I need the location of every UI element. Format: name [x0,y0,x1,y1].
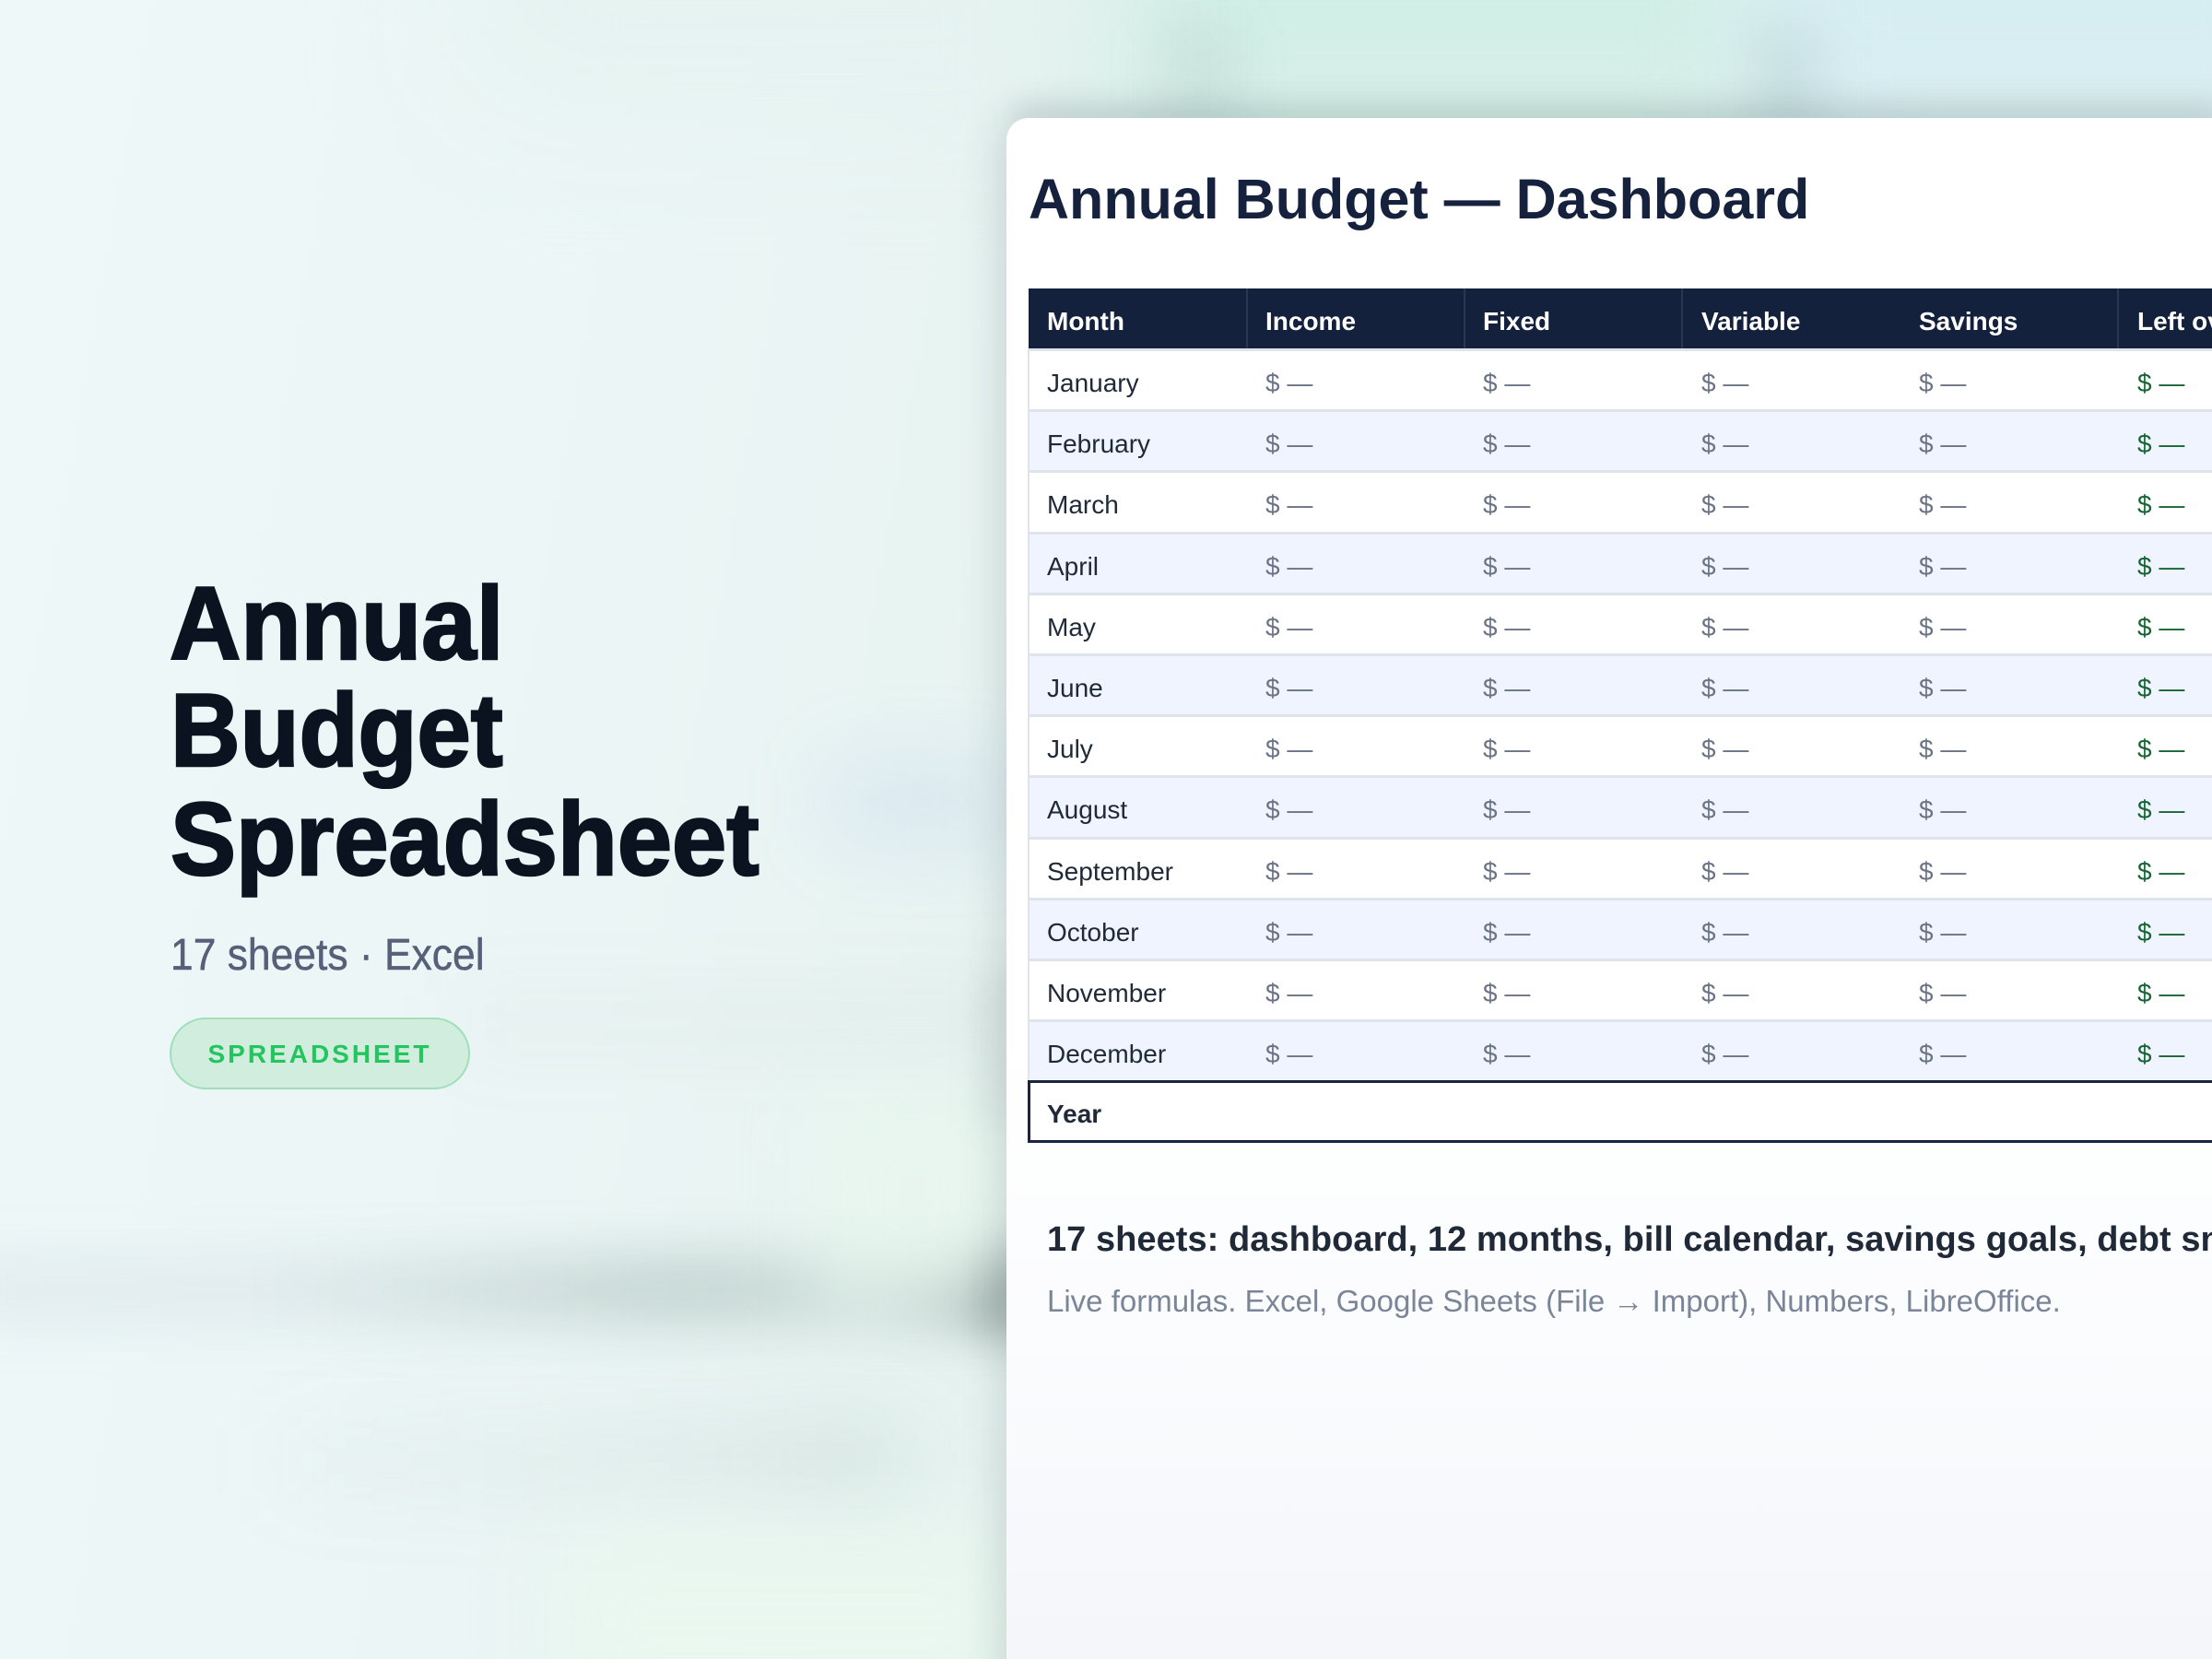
table row: May: $ — [1701,613,1748,641]
table row: August: $ — [1701,795,1748,824]
table row: March: March [1047,490,1119,519]
table row: August [1028,778,2212,840]
table row: April: $ — [2137,552,2184,581]
table row: January [1028,351,2212,412]
badge: spreadsheet [170,1018,470,1089]
table row: July: $ — [2137,735,2184,763]
table header row: Month [1047,307,1124,335]
table row: May [1028,595,2212,656]
table row: November: $ — [1919,979,1966,1007]
table row: January: $ — [1919,369,1966,397]
table row: December: $ — [2137,1040,2184,1068]
table row: July: $ — [1919,735,1966,763]
table row: January: $ — [1265,369,1312,397]
table row: February [1028,412,2212,473]
table row: September: $ — [1701,857,1748,886]
title: Annual Budget Spreadsheet [170,566,759,898]
table row: February: $ — [2137,429,2184,458]
table row: June: $ — [2137,674,2184,702]
table row: November: $ — [1701,979,1748,1007]
subtitle: 17 sheets · Excel [171,931,485,980]
table row: May: $ — [2137,613,2184,641]
table row: September: $ — [1483,857,1530,886]
table row: April: April [1047,552,1099,581]
table row: March: $ — [1265,490,1312,519]
text: compatibility note: Live formulas. Excel, Google Sheets (File → Import), Numbers, LibreOffice. [1047,1284,2061,1318]
table row: June: $ — [1265,674,1312,702]
table row: August: $ — [2137,795,2184,824]
table row: December [1028,1022,2212,1081]
table row: September: September [1047,857,1173,886]
table row: February: $ — [1701,429,1748,458]
table row: October: $ — [1919,918,1966,947]
table row: August: $ — [1265,795,1312,824]
title: Annual Budget Spreadsheet: Spreadsheet [171,782,759,897]
table row: April: $ — [1701,552,1748,581]
table row: August: $ — [1919,795,1966,824]
table row: January: $ — [1701,369,1748,397]
table row: October [1028,900,2212,961]
table row: March: $ — [1701,490,1748,519]
table row: June: $ — [1701,674,1748,702]
table row: April: $ — [1483,552,1530,581]
table row: December: December [1047,1040,1166,1068]
table row: February: $ — [1265,429,1312,458]
table row: September: $ — [1919,857,1966,886]
table row: September [1028,840,2212,900]
table row: June: June [1047,674,1103,702]
heading: dashboard title: Annual Budget — Dashboard [1029,168,1809,230]
table row: January: $ — [2137,369,2184,397]
table row: July [1028,717,2212,778]
table row: October: October [1047,918,1139,947]
table row: February: $ — [1483,429,1530,458]
table row: May: $ — [1483,613,1530,641]
table row: April: $ — [1265,552,1312,581]
title: Annual Budget Spreadsheet: Annual [170,566,503,681]
table row: October: $ — [1701,918,1748,947]
table row: December: $ — [1483,1040,1530,1068]
table row: January: January [1047,369,1139,397]
table row: December: $ — [1265,1040,1312,1068]
table row: July: $ — [1701,735,1748,763]
table row: Year total: Year [1047,1100,1101,1128]
badge: spreadsheet: SPREADSHEET [207,1040,432,1068]
table row: August: $ — [1483,795,1530,824]
table row: May: May [1047,613,1096,641]
table row: November: $ — [2137,979,2184,1007]
table row: November: $ — [1265,979,1312,1007]
table row: March: $ — [2137,490,2184,519]
table row: July: $ — [1483,735,1530,763]
table row: March: $ — [1919,490,1966,519]
table row: August: August [1047,795,1127,824]
panel: dashboard card [1006,118,2212,1659]
table row: May: $ — [1919,613,1966,641]
table row: June: $ — [1919,674,1966,702]
table row: March [1028,473,2212,535]
table row: December: $ — [1701,1040,1748,1068]
table row: September: $ — [1265,857,1312,886]
table row: June: $ — [1483,674,1530,702]
table row: September: $ — [2137,857,2184,886]
table row: October: $ — [1483,918,1530,947]
table row: November [1028,961,2212,1022]
table row: November: $ — [1483,979,1530,1007]
title: Annual Budget Spreadsheet: Budget [171,673,503,788]
table row: April: $ — [1919,552,1966,581]
table row: March: $ — [1483,490,1530,519]
table row: February: February [1047,429,1150,458]
table row: December: $ — [1919,1040,1966,1068]
table header row: Savings [1919,307,2018,335]
table header row [1029,288,2212,348]
table header row: Income [1265,307,1356,335]
table row: April [1028,535,2212,595]
table row: October: $ — [2137,918,2184,947]
table row: July: $ — [1265,735,1312,763]
table row: October: $ — [1265,918,1312,947]
table row: May: $ — [1265,613,1312,641]
table header row: Fixed [1483,307,1550,335]
table header row: Variable [1701,307,1800,335]
table row: January: $ — [1483,369,1530,397]
table row: June [1028,656,2212,717]
table row: July: July [1047,735,1093,763]
table row: November: November [1047,979,1166,1007]
table row: Year total [1028,1080,2212,1143]
table row: February: $ — [1919,429,1966,458]
